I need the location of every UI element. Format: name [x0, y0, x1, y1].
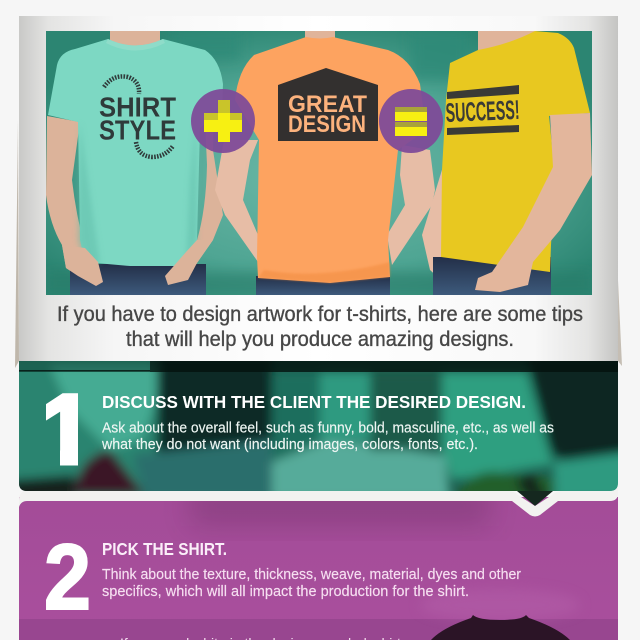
panel: step 2 purple	[19, 486, 618, 640]
logo: great design: DESIGN	[288, 111, 366, 138]
panel: step 1 photo	[19, 361, 618, 491]
panel: intro card	[15, 16, 622, 368]
icon: plus badge	[191, 89, 255, 153]
man 1: mint shirt	[46, 31, 223, 295]
logo: success: SUCCESS!	[445, 95, 520, 128]
logo: success	[445, 85, 520, 135]
man 3: yellow shirt	[422, 31, 592, 295]
step 2 body	[102, 566, 521, 600]
step 2 body: Think about the texture, thickness, weave, material, dyes and other	[102, 566, 521, 583]
intro text: If you have to design artwork for t-shirts, here are some tips	[57, 303, 583, 326]
logo: great design: GREAT	[288, 91, 367, 118]
step 2 body: specifics, which will all impact the production for the shirt.	[102, 583, 469, 600]
intro text: that will help you produce amazing designs.	[126, 328, 514, 351]
logo: shirt style: STYLE	[99, 114, 176, 146]
intro text	[57, 303, 583, 351]
arrow: white divider with notch	[19, 483, 618, 516]
step 1 heading: DISCUSS WITH THE CLIENT THE DESIRED DESIGN.	[102, 392, 526, 412]
step 2 heading: PICK THE SHIRT.	[102, 539, 227, 559]
icon: dark shirt silhouette	[431, 615, 570, 640]
step number 2: 2	[44, 525, 91, 629]
step number 1: 1	[40, 375, 94, 484]
logo: shirt style	[99, 76, 176, 157]
man 2: orange shirt	[215, 31, 435, 295]
step 1 body: what they do not want (including images, colors, fonts, etc.).	[101, 436, 478, 453]
logo: shirt style: SHIRT	[99, 92, 176, 122]
logo: great design	[278, 68, 378, 141]
step 1 body: Ask about the overall feel, such as funny, bold, masculine, etc., as well as	[102, 420, 554, 436]
icon: equals badge	[379, 89, 443, 153]
step 1 body	[101, 420, 554, 453]
photo: three men in t-shirts	[46, 31, 592, 295]
